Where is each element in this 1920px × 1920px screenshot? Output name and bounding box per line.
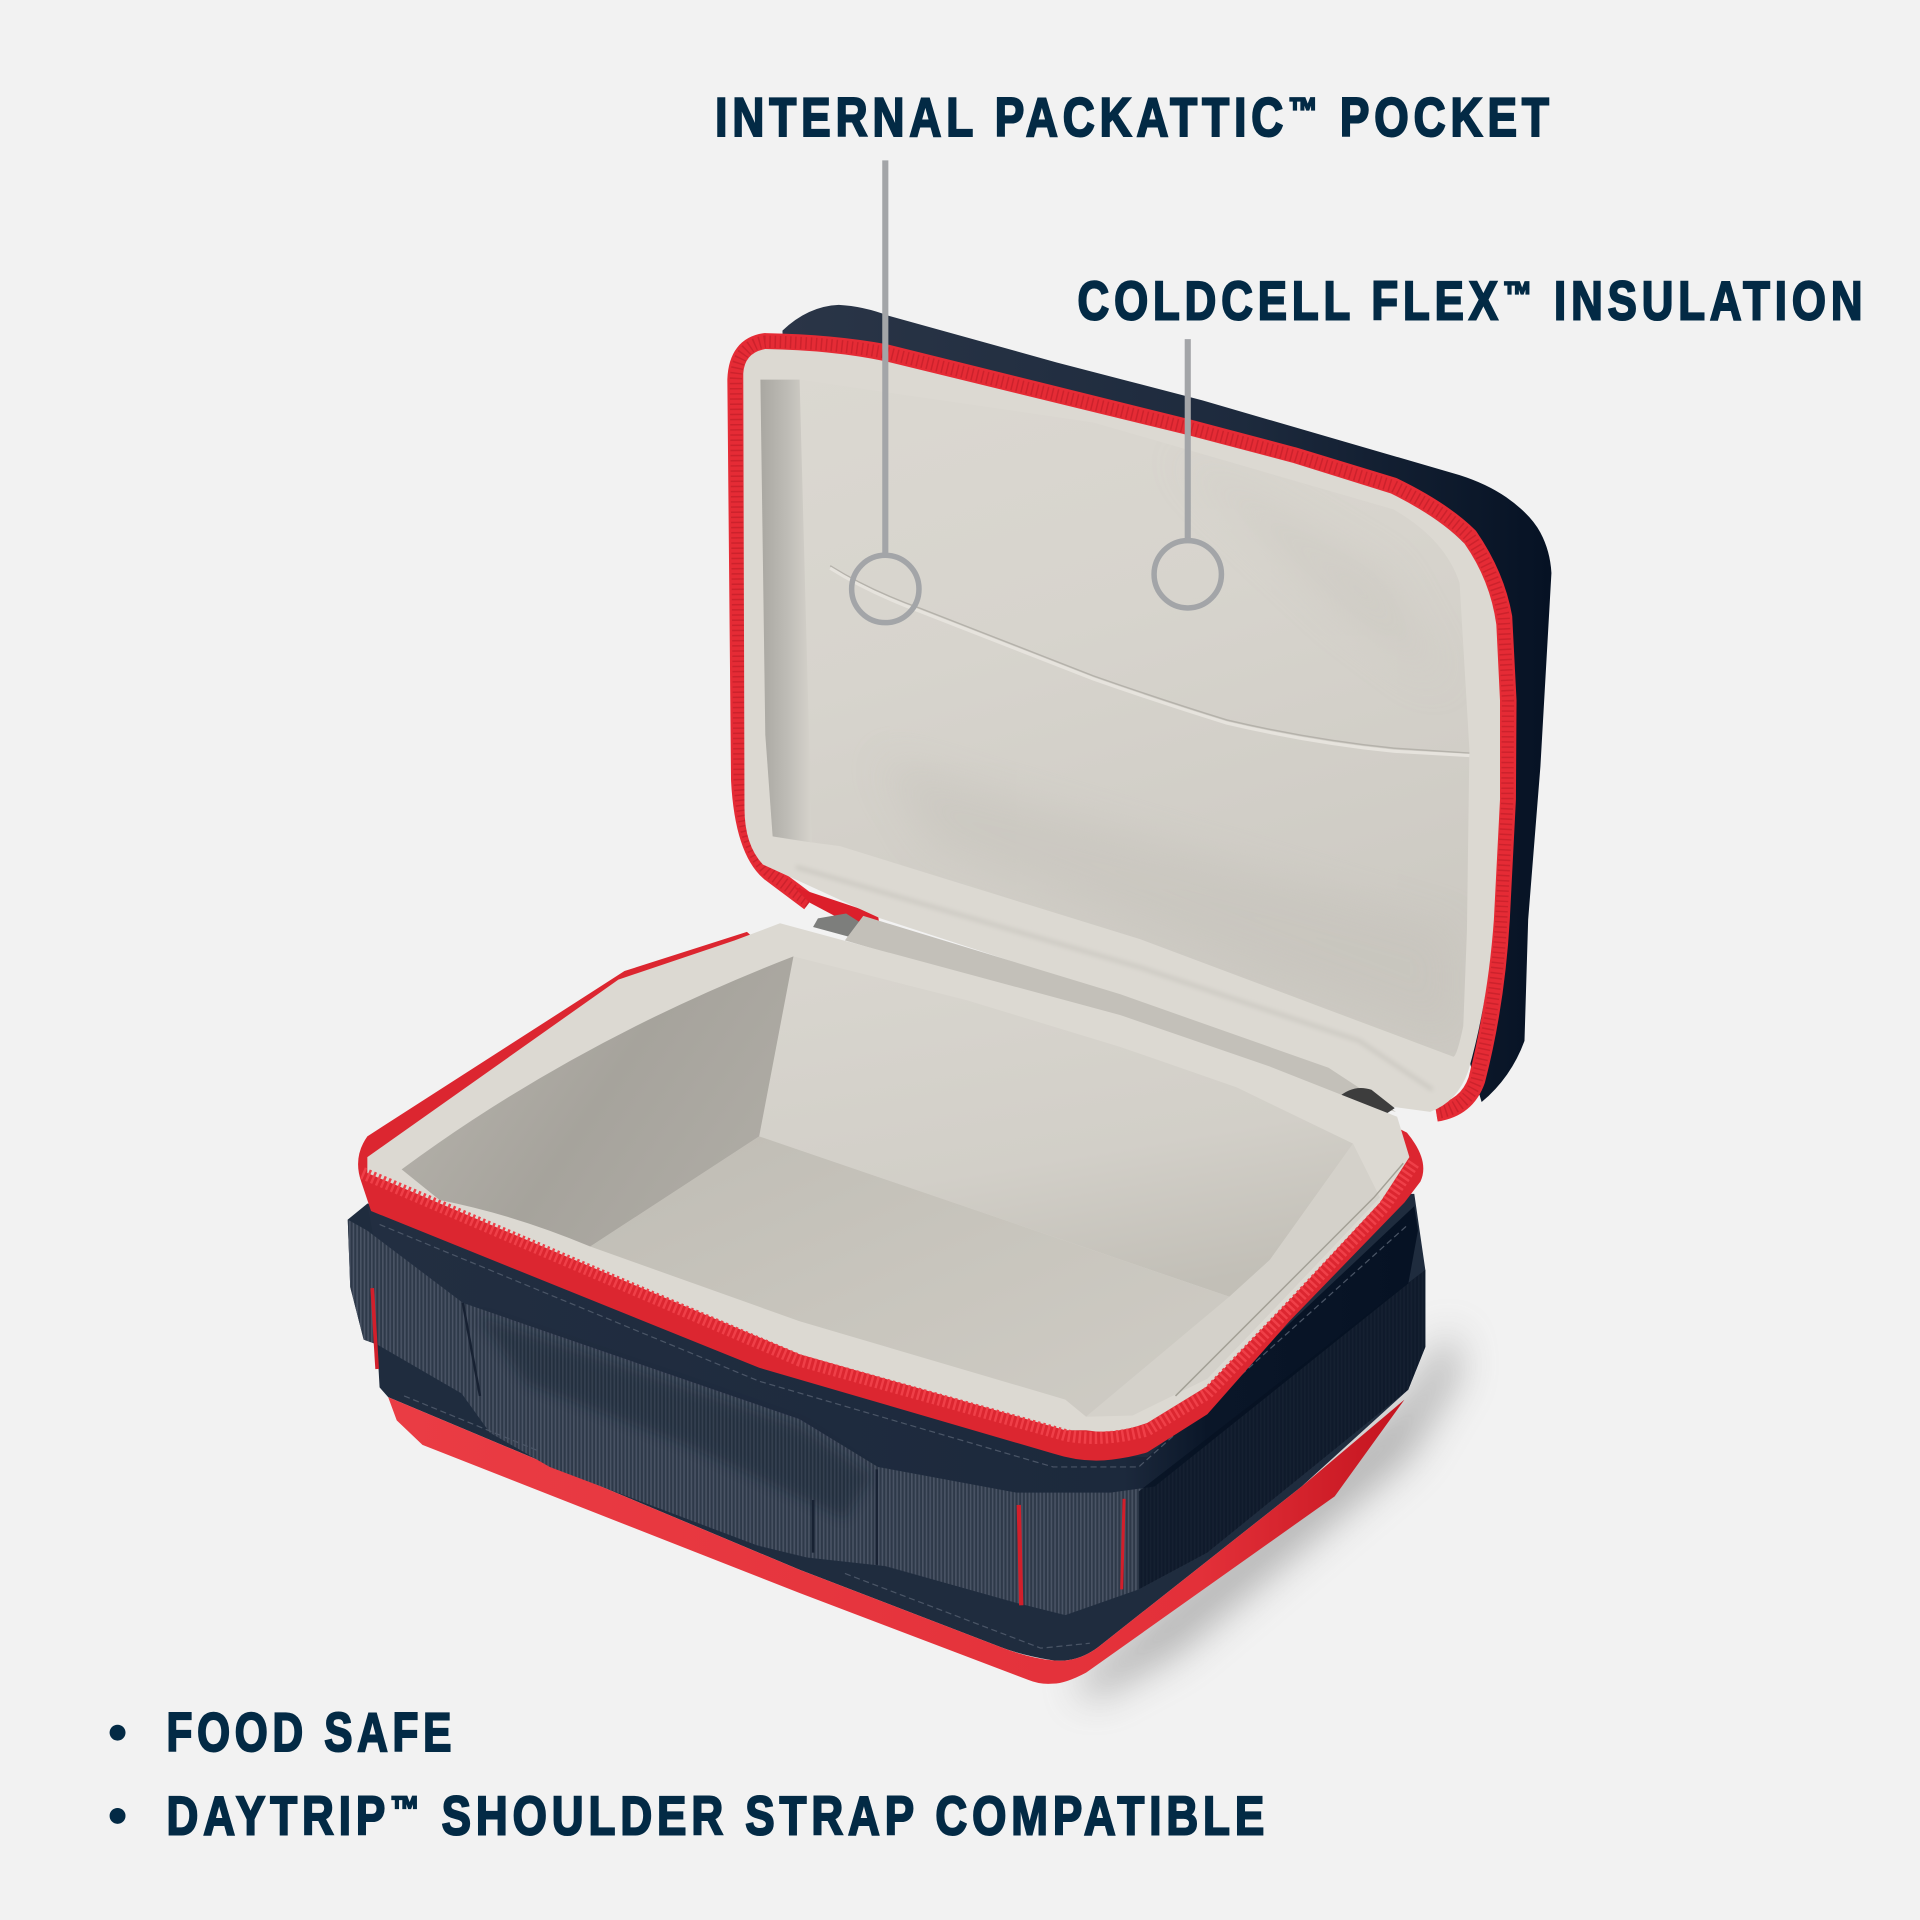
lower zipper — [358, 932, 1423, 1461]
floor — [590, 1136, 1229, 1417]
lid zipper — [736, 342, 1508, 1113]
handle recess shadow — [478, 1316, 872, 1518]
leader line — [1185, 339, 1190, 542]
panel soft shading — [882, 453, 1457, 1041]
channel between lid and base — [845, 916, 1396, 1112]
handle stitching — [463, 1303, 877, 1565]
bullet: shoulder strap: DAYTRIP — [167, 1784, 446, 1846]
strap right shaded side — [1139, 1270, 1425, 1589]
lower zipper teeth — [362, 1161, 1416, 1438]
right lip — [1086, 1144, 1380, 1417]
lid navy shell — [782, 305, 1551, 1102]
zipper teeth — [736, 342, 1508, 1113]
back wall — [759, 956, 1353, 1297]
bullet: food safe — [110, 1701, 456, 1763]
callout: pocket marker — [852, 160, 919, 623]
product: open lunch bag — [348, 305, 1551, 1684]
webbing strap — [348, 1220, 1425, 1615]
bullet: shoulder strap: ™ — [390, 1789, 424, 1830]
heading: insulation: ™ — [1503, 274, 1537, 315]
lower case — [348, 923, 1425, 1684]
lid hinge fold — [796, 867, 1433, 1090]
body navy — [348, 1194, 1425, 1661]
strap full band — [348, 1220, 1425, 1615]
zipper pull — [813, 913, 873, 942]
ground shadow — [1078, 1329, 1460, 1700]
callout: insulation marker — [1154, 339, 1221, 608]
zipper tape at hinge — [793, 887, 879, 933]
bullet: food safe: FOOD SAFE — [167, 1701, 456, 1763]
red base — [388, 1397, 1404, 1684]
heading: internal pocket: INTERNAL PACKATTIC — [715, 86, 1428, 148]
lower liner rim — [367, 923, 1409, 1432]
pocket seam — [830, 566, 1469, 756]
marker ring — [852, 555, 919, 623]
body seam stitching — [380, 1224, 1408, 1648]
navy collar — [367, 1204, 1418, 1500]
marker ring — [1154, 541, 1221, 608]
lid — [736, 305, 1551, 1116]
bullet: shoulder strap — [110, 1784, 1269, 1846]
bullet: shoulder strap: SHOULDER STRAP COMPATIBLE — [424, 1784, 1269, 1846]
lid inner panel — [760, 380, 1469, 1057]
inner right seam — [1176, 1163, 1403, 1396]
heading: internal pocket: ™ — [1288, 91, 1323, 132]
heading: internal pocket: POCKET — [1323, 86, 1554, 148]
lid liner — [743, 349, 1500, 1112]
red stitches — [372, 1288, 1124, 1605]
rear hinge — [1337, 1088, 1395, 1116]
heading: insulation: COLDCELL FLEX — [1078, 270, 1612, 332]
leader line — [883, 160, 888, 557]
left wall — [402, 956, 793, 1247]
lid left shaded strip — [760, 380, 812, 842]
